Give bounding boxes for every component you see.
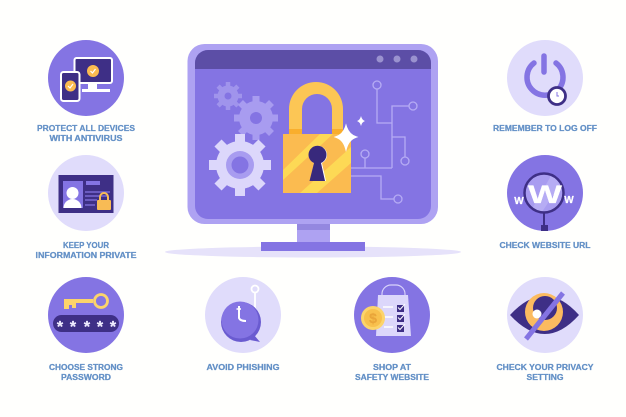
icon: key and password [48,277,124,353]
panel: shop at safety website [354,277,430,382]
label [496,363,594,382]
panel: keep information private [36,155,137,260]
gear: large [209,134,271,196]
padlock [283,82,351,193]
label: INFORMATION PRIVATE [36,251,137,260]
label: CHOOSE STRONG [49,363,123,372]
label: SETTING [526,373,564,382]
sparkle: small [357,116,365,126]
icon: key and password: * [57,319,64,336]
panel: strong password [48,277,124,382]
icon: magnifier with w: W [514,196,524,207]
icon: key and password: * [84,319,91,336]
icon: fishing hook bubble [205,277,281,353]
label: CHECK YOUR PRIVACY [496,363,594,372]
panel: remember to log off [493,40,597,133]
panel: check website url [500,155,591,250]
label: CHECK WEBSITE URL [500,241,591,250]
label: PROTECT ALL DEVICES [37,124,136,133]
icon: key and password: * [110,319,117,336]
monitor shadow [165,246,461,258]
icon: magnifier with w: W [528,181,563,209]
icon: magnifier with w: W [564,195,574,206]
label: AVOID PHISHING [206,363,280,372]
label [355,363,430,382]
monitor illustration [165,44,461,258]
label [37,124,136,143]
icon: magnifier with w [507,155,583,231]
icon: shopping bag and coin: $ [369,310,377,326]
monitor stand [261,224,365,251]
label: REMEMBER TO LOG OFF [493,124,597,133]
icon: key and password: * [97,319,104,336]
circuit lines [351,81,417,203]
sparkle: large [336,126,356,149]
label [49,363,123,382]
icon: devices [48,40,124,116]
panel: privacy setting [496,277,594,382]
gear: medium [234,96,278,140]
label [36,241,137,260]
icon: key and password: * [70,319,77,336]
panel: protect all devices [37,40,136,143]
label: KEEP YOUR [63,241,109,250]
panel: avoid phishing [205,277,281,372]
icon: crossed eye [507,277,583,353]
label: WITH ANTIVIRUS [50,134,123,143]
icon: id card [48,155,124,231]
browser title bar [195,50,431,69]
icon: power button with clock [507,40,583,116]
label: SAFETY WEBSITE [355,373,430,382]
label: PASSWORD [61,373,111,382]
monitor frame [188,44,438,224]
gear: small [214,82,242,110]
monitor screen [195,50,431,219]
label: SHOP AT [373,363,411,372]
